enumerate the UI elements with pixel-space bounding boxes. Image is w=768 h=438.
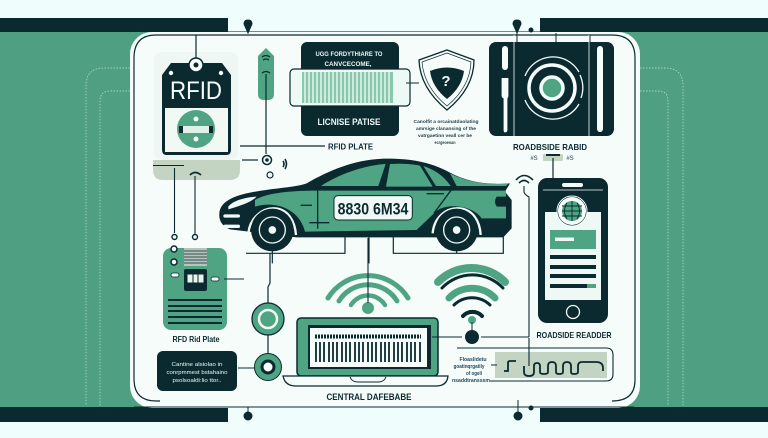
dark description box: Cantine alsiolao in [172, 362, 222, 368]
taupe holder below tag with leader lines [153, 160, 240, 240]
license plate: 8830 6M34 [338, 199, 409, 218]
shield description text [414, 119, 479, 146]
headlight [228, 197, 257, 209]
background dotted circuit lines [86, 68, 683, 406]
icon: large wifi signal [432, 268, 529, 344]
shield description text: Canolfit a orcainatdaolating [414, 119, 479, 125]
icon: roadside radar panel [489, 35, 614, 136]
circular nodes [252, 253, 284, 380]
icon: RFID tag [162, 35, 231, 155]
bottom right dark bar [540, 407, 768, 422]
waveform description text: of ogeli [466, 371, 483, 377]
icon: shield with question mark [406, 50, 474, 110]
bumper lights [225, 216, 238, 226]
label: central database: CENTRAL DAFEBABE [326, 392, 412, 402]
rear wheel [433, 208, 481, 251]
radar sub label: #S [566, 156, 574, 162]
waveform description text: Floaslidetu [460, 357, 486, 363]
pale backing behind tag [154, 52, 238, 160]
radar sub label [530, 154, 574, 179]
icon: green tag card [163, 246, 244, 330]
waveform description text: nsaddtransssm [452, 378, 491, 384]
icon: RFID tag: RFID [170, 77, 222, 105]
shield description text: vatrgaetinn veall cer be [418, 133, 472, 139]
icon: shield with question mark: ? [441, 73, 451, 90]
icon: small green signal tag [258, 48, 274, 154]
label: RFD Rid Plate: RFD Rid Plate [172, 335, 220, 344]
pin connectors [244, 20, 590, 420]
car green panels [255, 191, 506, 232]
dark description box: conrpmmest bstahaino [166, 370, 228, 376]
tail light [495, 197, 507, 207]
radar sub label: #S [530, 156, 538, 162]
top left dark bar [0, 18, 228, 32]
door details [301, 189, 452, 229]
icon: small wifi near phone [516, 176, 533, 337]
car body outline [219, 159, 512, 237]
barcode plate [290, 69, 410, 106]
signal waveform box [457, 338, 613, 381]
car connector lines [246, 223, 503, 263]
license plate [334, 196, 412, 220]
rear deck highlight [450, 173, 508, 186]
shield description text: amrsige clanansing of the [416, 126, 476, 132]
bottom left dark bar [0, 407, 228, 422]
top right dark bar [540, 18, 768, 32]
panel caption line two: CANVCECOME, [324, 61, 372, 68]
label: roadside reader: ROADSIDE READDER [536, 330, 612, 340]
signal node [242, 156, 286, 178]
car with license plate [219, 159, 512, 263]
shield description text: ecrgeoenan [434, 140, 456, 146]
label: RFID plate: RFID PLATE [328, 142, 374, 152]
front wheel [248, 208, 296, 251]
waveform description text [452, 357, 491, 384]
icon: wifi over laptop [328, 238, 408, 314]
label: RFID plate [240, 142, 374, 152]
plate label: LICNISE PATISE [318, 117, 380, 127]
panel caption: UGG FORDYTHIARE TO [316, 51, 382, 58]
dark description box: psolsoaldi:lio ttor.. [172, 378, 222, 384]
waveform description text: goatinqrgatily [454, 364, 485, 370]
label: roadside radar: ROADBSIDE RABID [513, 142, 587, 152]
dark license plate panel [290, 42, 410, 136]
car windows [321, 164, 451, 187]
dark description box [157, 351, 256, 391]
main white panel [130, 32, 640, 408]
icon: smartphone [538, 178, 608, 323]
icon: central database laptop [283, 318, 448, 386]
